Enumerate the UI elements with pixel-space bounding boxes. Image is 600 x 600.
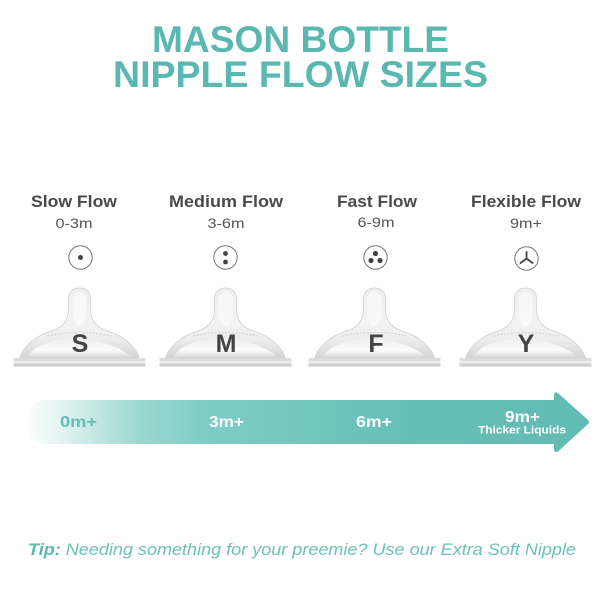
heading: fast flow: Fast Flow xyxy=(337,193,417,211)
heading: slow flow: Slow Flow xyxy=(31,193,117,211)
icon: three holes xyxy=(364,246,387,269)
nipple Y xyxy=(460,288,592,366)
nipple S xyxy=(14,288,146,366)
label: thicker liquids: Thicker Liquids xyxy=(478,424,566,436)
nipple M: M xyxy=(216,330,236,358)
icon: Y cut xyxy=(515,247,538,270)
column: fast flow xyxy=(308,193,440,366)
age range: 6-9m: 6-9m xyxy=(358,214,394,230)
nipple F xyxy=(308,288,440,366)
column: medium flow xyxy=(160,193,292,366)
arrow: age progression xyxy=(28,392,589,452)
heading: medium flow: Medium Flow xyxy=(169,193,283,211)
age range: 9m+: 9m+ xyxy=(510,215,542,231)
title: NIPPLE FLOW SIZES xyxy=(113,53,488,95)
nipple Y: Y xyxy=(518,330,535,358)
icon: two holes xyxy=(214,246,237,269)
label: 3m+: 3m+ xyxy=(209,414,244,431)
label: 9m+: 9m+ xyxy=(505,409,540,426)
column: flexible flow xyxy=(460,193,592,366)
heading: flexible flow: Flexible Flow xyxy=(471,193,581,211)
nipple F: F xyxy=(368,330,384,358)
nipple M xyxy=(160,288,292,366)
icon: single hole xyxy=(69,246,92,269)
title: MASON BOTTLE xyxy=(152,18,449,60)
nipple S: S xyxy=(72,330,88,358)
age range: 3-6m: 3-6m xyxy=(208,215,244,231)
title xyxy=(113,18,488,95)
label: 6m+: 6m+ xyxy=(356,414,392,431)
label: 0m+: 0m+ xyxy=(60,414,97,431)
age range: 0-3m: 0-3m xyxy=(56,215,92,231)
tip: Tip: Needing something for your preemie? Use our Extra Soft Nipple xyxy=(28,541,576,559)
column: slow flow xyxy=(14,193,146,366)
